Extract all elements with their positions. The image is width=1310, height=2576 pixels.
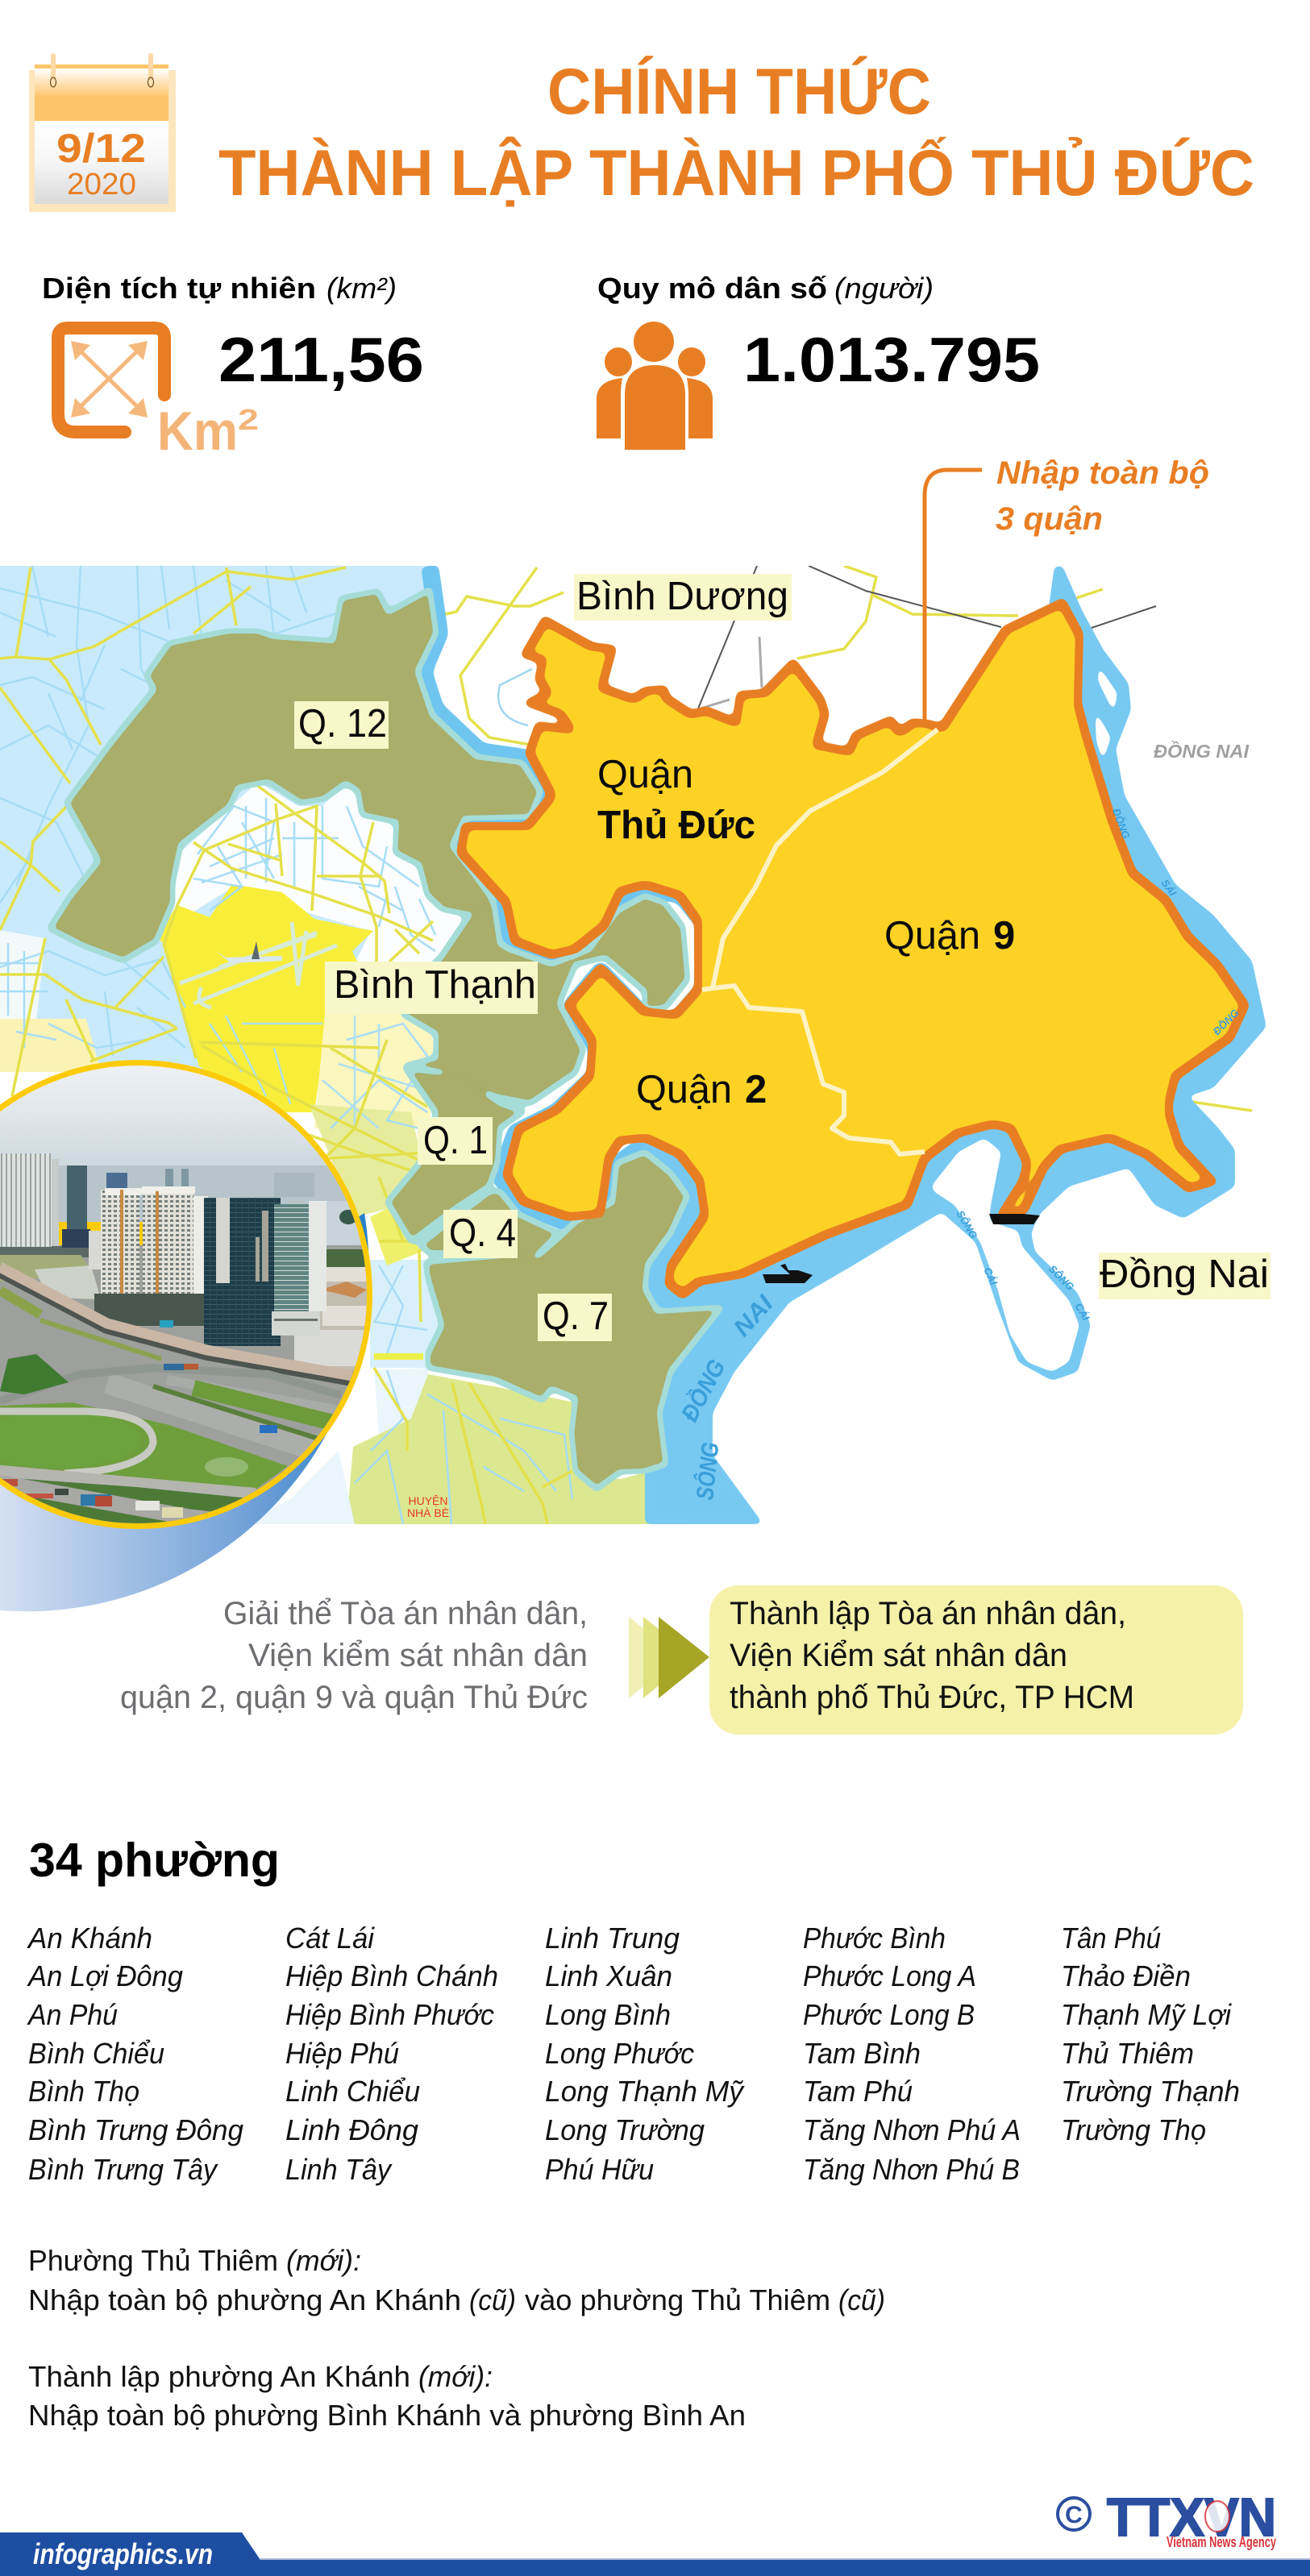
- map: [0, 566, 1270, 1524]
- column 3: Long Thạnh Mỹ: [545, 2075, 745, 2108]
- stat label: area: Diện tích tự nhiên: [42, 272, 316, 305]
- label: Quận Thủ Đức: Quận: [597, 753, 693, 796]
- column 5: Trường Thạnh: [1061, 2075, 1240, 2108]
- column 4: Tam Phú: [803, 2075, 913, 2108]
- note: Phường Thủ Thiêm: (cũ): [838, 2283, 885, 2316]
- column 5: Thủ Thiêm: [1061, 2037, 1194, 2070]
- column 1: Bình Thọ: [28, 2075, 139, 2108]
- river labels: ĐỒNG: [1110, 807, 1133, 841]
- icon: calendar 9/12/2020: [29, 53, 176, 212]
- icon: area km2: Km: [157, 401, 238, 462]
- stat label: area: (km²): [326, 272, 397, 305]
- note: Phường Thủ Thiêm: Phường Thủ Thiêm: [28, 2244, 278, 2277]
- note: Phường Thủ Thiêm: (cũ): [469, 2283, 516, 2316]
- callout: Nhập toàn bộ 3 quận: 3 quận: [996, 501, 1103, 537]
- column 5: Trường Thọ: [1061, 2113, 1206, 2146]
- note: Thành lập phường An Khánh: [28, 2360, 746, 2432]
- column 3: Long Bình: [545, 1998, 671, 2031]
- label: Q. 12: Q. 12: [298, 702, 387, 746]
- note: Phường Thủ Thiêm: Nhập toàn bộ phường An Khánh: [28, 2283, 461, 2316]
- column 5: [1061, 1922, 1240, 2146]
- column 2: Linh Đông: [285, 2113, 418, 2146]
- column 5: Thảo Điền: [1061, 1959, 1191, 1992]
- label: Quận Thủ Đức: Thủ Đức: [597, 804, 755, 847]
- river labels: CÁI: [981, 1265, 1000, 1287]
- map roads: yellow main roads: [0, 566, 1252, 1524]
- plane icon: [216, 941, 282, 962]
- label: Q. 4: Q. 4: [449, 1211, 516, 1255]
- river labels: NAI: [729, 1290, 779, 1342]
- district label: Huyện Nhà Bè: [407, 1494, 449, 1519]
- river labels: SÔNG: [954, 1208, 980, 1241]
- blue crescent behind photo: [0, 1213, 369, 1611]
- column 5: Tân Phú: [1061, 1922, 1161, 1955]
- box: new courts established: Viện Kiểm sát nhân dân: [730, 1638, 1067, 1673]
- column 2: Linh Tây: [285, 2153, 393, 2186]
- column 4: Phước Long B: [803, 1998, 975, 2031]
- map background: airport yellow: [156, 884, 373, 1112]
- icon: calendar 9/12/2020: 9/12: [56, 126, 146, 171]
- column 5: Thạnh Mỹ Lợi: [1061, 1998, 1232, 2031]
- note: Thành lập phường An Khánh: (mới):: [418, 2360, 493, 2393]
- column 2: Cát Lái: [285, 1922, 375, 1955]
- column 4: Tăng Nhơn Phú A: [803, 2113, 1021, 2146]
- box: new courts established: thành phố Thủ Đức, TP HCM: [730, 1680, 1134, 1715]
- districts: Q. 12, Bình Thạnh, Q. 1, Q. 4, Q. 7: [49, 589, 722, 1490]
- column 3: Long Phước: [545, 2037, 694, 2070]
- mid ground: [0, 1245, 379, 1531]
- river labels: SÔNG: [691, 1441, 724, 1502]
- label: Quận 9: 9: [993, 914, 1015, 958]
- column 4: Phước Bình: [803, 1922, 946, 1955]
- column 3: Linh Xuân: [545, 1959, 672, 1992]
- column 1: [27, 1922, 243, 2186]
- river labels: ĐỒNG: [676, 1355, 731, 1426]
- icon: area km2: [58, 328, 259, 462]
- text: dissolution of courts: Giải thể Tòa án nhân dân,: [223, 1596, 588, 1631]
- map background: light blue rural area: [0, 566, 451, 1072]
- box: new courts established: [709, 1585, 1243, 1735]
- label: Đồng Nai: Đồng Nai: [1100, 1253, 1269, 1296]
- column 4: Phước Long A: [803, 1959, 976, 1992]
- column 1: An Phú: [27, 1998, 118, 2031]
- stat label: population: [597, 272, 934, 305]
- boat icon 2: [989, 1214, 1040, 1224]
- map background: Nhà Bè green: [347, 1374, 688, 1524]
- map: railways: [698, 566, 1156, 709]
- lower roads: [0, 1469, 256, 1494]
- text: dissolution of courts: [120, 1596, 588, 1715]
- callout: Nhập toàn bộ 3 quận: Nhập toàn bộ: [996, 455, 1209, 491]
- airport runways: [180, 922, 337, 1008]
- column 3: [545, 1922, 745, 2186]
- logo: TTXVN: TTXVN: [1107, 2487, 1276, 2548]
- title: THÀNH LẬP THÀNH PHỐ THỦ ĐỨC: [218, 136, 1254, 210]
- callout line: [925, 470, 982, 720]
- column 3: Long Trường: [545, 2113, 705, 2146]
- title: [218, 55, 1254, 210]
- trucks: [0, 1479, 18, 1486]
- note: Phường Thủ Thiêm: vào phường Thủ Thiêm: [525, 2283, 830, 2316]
- column 2: Hiệp Phú: [285, 2037, 399, 2070]
- towers: [0, 1153, 52, 1247]
- label: Q. 1: Q. 1: [423, 1119, 488, 1162]
- column 1: Bình Chiểu: [28, 2037, 164, 2070]
- column 4: Tam Bình: [803, 2037, 921, 2070]
- column 3: Linh Trung: [545, 1922, 680, 1955]
- stat label: population: (người): [834, 272, 934, 305]
- boat icon 1: [763, 1264, 813, 1283]
- callout: Nhập toàn bộ 3 quận: [996, 455, 1209, 537]
- column 2: Linh Chiểu: [285, 2075, 420, 2108]
- title: CHÍNH THỨC: [547, 55, 931, 128]
- icon: area km2: 2: [238, 403, 259, 436]
- stat value: area: 211,56: [218, 324, 424, 395]
- icon: people: [597, 322, 713, 450]
- river labels: SÁI: [1159, 877, 1179, 899]
- low-rise houses: [320, 1252, 379, 1370]
- column 1: An Khánh: [27, 1922, 152, 1955]
- new city area: Thủ Đức, Quận 2, Quận 9: [460, 602, 1246, 1295]
- river labels: ĐỒNG: [1211, 1007, 1241, 1037]
- river labels: [676, 807, 1241, 1502]
- column 4: Tăng Nhơn Phú B: [803, 2153, 1020, 2186]
- icon: calendar 9/12/2020: 2020: [67, 168, 136, 202]
- logo: TTXVN: C: [1065, 2502, 1083, 2528]
- label: Bình Dương: Bình Dương: [576, 575, 788, 618]
- column 4: [803, 1922, 1021, 2186]
- label: Quận 9: Quận: [884, 914, 980, 958]
- district borders inside city: [702, 729, 938, 1154]
- column 3: Phú Hữu: [545, 2153, 654, 2186]
- province label: Đồng Nai (small grey): ĐỒNG NAI: [1154, 740, 1250, 762]
- note: Phường Thủ Thiêm: (mới):: [286, 2244, 361, 2277]
- column 1: An Lợi Đông: [27, 1959, 183, 1992]
- arrow: triple chevrons: [629, 1617, 709, 1698]
- footer bar: [0, 2532, 1310, 2576]
- label: Quận 2: 2: [745, 1068, 767, 1111]
- river islands: [931, 665, 1117, 1372]
- stat label: area: [42, 272, 397, 305]
- photo: city and highway interchange: [0, 1060, 379, 1531]
- district label: Huyện Nhà Bè: HUYỆN: [408, 1494, 448, 1507]
- rivers: Đồng Nai and Sài Gòn: [423, 566, 1266, 1524]
- label: Quận Thủ Đức: [597, 753, 755, 847]
- district label: Huyện Nhà Bè: NHÀ BÈ: [407, 1506, 449, 1519]
- label: Q. 7: Q. 7: [543, 1294, 609, 1338]
- text: dissolution of courts: quận 2, quận 9 và quận Thủ Đức: [120, 1680, 588, 1715]
- note: Thành lập phường An Khánh: Nhập toàn bộ phường Bình Khánh và phường Bình An: [28, 2399, 746, 2432]
- column 1: Bình Trưng Đông: [28, 2113, 243, 2146]
- label: Bình Thạnh: Bình Thạnh: [334, 963, 536, 1007]
- lawns: [0, 1354, 69, 1394]
- list: ward names: [27, 1922, 1240, 2186]
- text: dissolution of courts: Viện kiểm sát nhân dân: [248, 1638, 588, 1673]
- footer bar: infographics.vn: [33, 2537, 213, 2570]
- heading: 34 phường: 34 phường: [29, 1834, 280, 1887]
- stat label: population: Quy mô dân số: [597, 272, 827, 305]
- column 2: [285, 1922, 498, 2186]
- note: Thành lập phường An Khánh: Thành lập phường An Khánh: [28, 2360, 410, 2393]
- column 2: Hiệp Bình Chánh: [285, 1959, 498, 1992]
- column 1: Bình Trưng Tây: [28, 2153, 218, 2186]
- stat value: population: 1.013.795: [743, 324, 1040, 395]
- box: new courts established: Thành lập Tòa án nhân dân,: [730, 1596, 1126, 1631]
- label: Quận 2: Quận: [636, 1068, 732, 1111]
- note: Phường Thủ Thiêm: [28, 2244, 885, 2316]
- river labels: CÁI: [1072, 1301, 1092, 1323]
- map roads: thin canal lines: [0, 566, 572, 1524]
- column 2: Hiệp Bình Phước: [285, 1998, 494, 2031]
- river labels: SÔNG: [1046, 1263, 1077, 1293]
- district outlines: [49, 589, 722, 1490]
- new city border: [460, 602, 1246, 1295]
- roads: [0, 1267, 352, 1459]
